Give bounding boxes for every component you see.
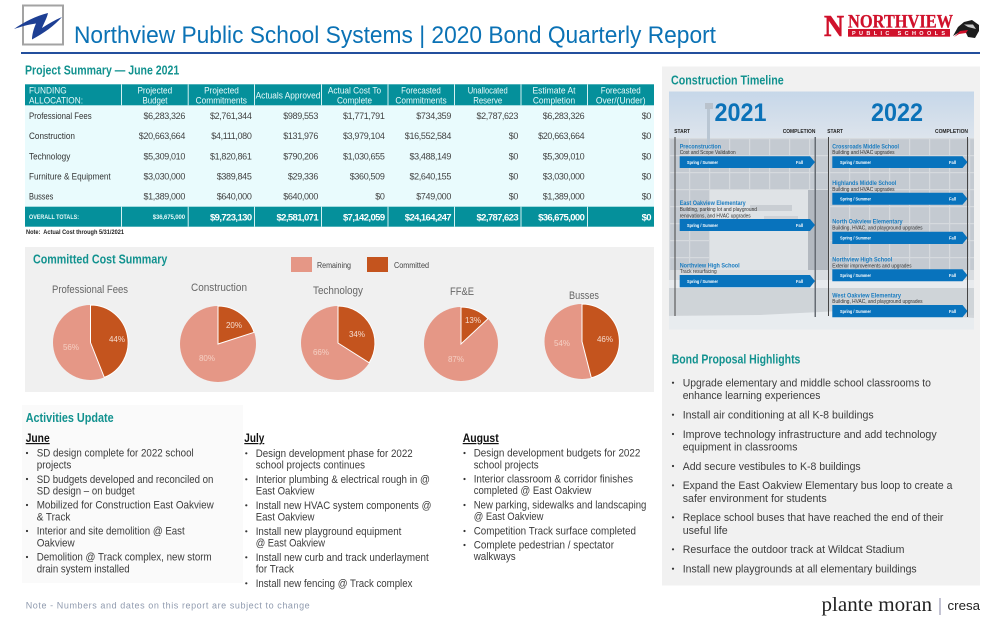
timeline item: North Oakview Elementary: Spring / Summer bbox=[840, 236, 871, 242]
table: funding allocation: $0 bbox=[642, 111, 651, 121]
table: funding allocation: Commitments bbox=[395, 95, 447, 105]
timeline item: Highlands Middle School bbox=[832, 180, 968, 205]
list: bond proposal highlights: equipment in classrooms bbox=[683, 442, 798, 454]
table: funding allocation: $1,771,791 bbox=[343, 111, 385, 121]
timeline item: Preconstruction: Cost and Scope Validation bbox=[680, 150, 736, 156]
timeline item: Crossroads Middle School: Crossroads Middle School bbox=[832, 144, 899, 150]
table: funding allocation: $0 bbox=[509, 151, 518, 161]
table: funding allocation: $734,359 bbox=[416, 111, 451, 121]
list: bond proposal highlights bbox=[672, 378, 953, 576]
table: funding allocation: $1,820,861 bbox=[210, 151, 252, 161]
column: July bbox=[244, 431, 431, 590]
table: funding allocation: $36,675,000 bbox=[538, 212, 585, 224]
table: funding allocation: $749,000 bbox=[416, 192, 451, 202]
list: bond proposal highlights: Install air conditioning at all K-8 buildings bbox=[683, 410, 874, 422]
table: funding allocation: $1,389,000 bbox=[143, 192, 185, 202]
table: funding allocation: $5,309,010 bbox=[543, 151, 585, 161]
column: July: for Track bbox=[256, 564, 294, 576]
legend: Committed bbox=[394, 261, 429, 270]
logo: plante moran | cresa bbox=[822, 594, 981, 616]
pie chart: professional fees bbox=[52, 284, 128, 380]
table: funding allocation: $16,552,584 bbox=[405, 131, 451, 141]
column: July: Install new playground equipment bbox=[256, 526, 401, 538]
year: 2021: 2021 bbox=[714, 99, 767, 127]
list: bond proposal highlights: enhance learning experiences bbox=[683, 390, 821, 402]
table: funding allocation: Commitments bbox=[196, 95, 247, 105]
table: funding allocation: ALLOCATION: bbox=[29, 95, 83, 105]
table: funding allocation: Estimate At bbox=[532, 85, 576, 95]
table: funding allocation: $9,723,130 bbox=[210, 212, 252, 224]
panel: committed cost summary bbox=[25, 247, 654, 392]
column: August: @ East Oakview bbox=[474, 511, 543, 523]
timeline item: Crossroads Middle School: Fall bbox=[949, 160, 956, 166]
table: funding allocation: Reserve bbox=[473, 95, 502, 105]
table: funding allocation: OVERALL TOTALS: bbox=[29, 214, 79, 221]
timeline item: Northview High School track bbox=[680, 262, 815, 287]
column: July: Interior plumbing & electrical rough in @ bbox=[256, 474, 430, 486]
table: funding allocation: $3,488,149 bbox=[409, 151, 451, 161]
table: funding allocation: Construction bbox=[29, 131, 75, 141]
construction timeline chart bbox=[669, 92, 974, 330]
pie chart: construction: 20% bbox=[226, 321, 242, 330]
column: June: Interior and site demolition @ East bbox=[37, 526, 185, 538]
timeline item: Highlands Middle School: Fall bbox=[949, 196, 956, 202]
timeline item: West Oakview Elementary: West Oakview Elementary bbox=[832, 292, 901, 299]
column: June: & Track bbox=[37, 512, 71, 524]
list: bond proposal highlights: Resurface the outdoor track at Wildcat Stadium bbox=[683, 544, 904, 556]
timeline item: Northview High School exterior: Northview High School bbox=[832, 256, 893, 263]
table: funding allocation: Forecasted bbox=[601, 85, 641, 95]
table: funding allocation: $6,283,326 bbox=[143, 111, 185, 121]
column: August: school projects bbox=[474, 460, 539, 472]
timeline item: North Oakview Elementary: North Oakview Elementary bbox=[832, 218, 903, 225]
heading: project summary: Project Summary — June 2021 bbox=[25, 64, 179, 78]
pie chart: professional fees: Professional Fees bbox=[52, 284, 128, 296]
pie chart: busses bbox=[544, 290, 620, 379]
timeline item: North Oakview Elementary: Building, HVAC, and playground upgrades bbox=[832, 226, 923, 232]
legend bbox=[291, 257, 429, 272]
pie chart: FF&E: FF&E bbox=[450, 286, 474, 298]
table: funding allocation: $36,675,000 bbox=[153, 215, 186, 221]
panel: activities update bbox=[22, 405, 646, 590]
list: bond proposal highlights: Expand the East Oakview Elementary bus loop to create a bbox=[683, 480, 953, 492]
column: June bbox=[26, 431, 214, 576]
timeline item: Crossroads Middle School bbox=[832, 144, 968, 168]
timeline item: West Oakview Elementary bbox=[832, 292, 968, 317]
table: funding allocation: $1,389,000 bbox=[543, 192, 585, 202]
column: July: Install new curb and track underlayment bbox=[256, 552, 429, 564]
table: funding allocation: $2,640,155 bbox=[409, 172, 451, 182]
list: bond proposal highlights: safer environment for students bbox=[683, 493, 827, 505]
table: funding allocation: $360,509 bbox=[350, 172, 385, 182]
timeline item: East Oakview Elementary: Fall bbox=[796, 223, 803, 229]
timeline item: Northview High School exterior: Exterior improvements and upgrades bbox=[832, 263, 912, 269]
timeline item: East Oakview Elementary: Spring / Summer bbox=[687, 223, 718, 229]
header rule bbox=[21, 52, 980, 54]
list: bond proposal highlights: useful life bbox=[683, 525, 728, 537]
timeline 2022 axis: START bbox=[827, 129, 843, 135]
table: funding allocation: $0 bbox=[509, 192, 518, 202]
table: funding allocation: $2,581,071 bbox=[276, 212, 319, 224]
pie chart: FF&E bbox=[424, 286, 498, 381]
column: June: projects bbox=[37, 460, 72, 472]
table: funding allocation: Actuals Approved bbox=[256, 90, 320, 100]
list: bond proposal highlights: Replace school buses that have reached the end of their bbox=[683, 512, 944, 524]
column: June: June bbox=[26, 431, 50, 445]
panel: project summary bbox=[25, 64, 654, 236]
table: funding allocation: $3,030,000 bbox=[543, 172, 585, 182]
heading: committed cost summary: Committed Cost Summary bbox=[33, 252, 167, 266]
column: June: Oakview bbox=[37, 538, 75, 550]
column: August: Interior classroom & corridor finishes bbox=[474, 474, 633, 486]
timeline item: East Oakview Elementary bbox=[680, 200, 815, 231]
logo: Northview Public Schools: N bbox=[824, 8, 844, 43]
column: June: SD budgets developed and reconciled on bbox=[37, 474, 213, 486]
year: 2022: 2022 bbox=[871, 99, 923, 127]
timeline item: Northview High School track: Fall bbox=[796, 279, 803, 285]
timeline item: West Oakview Elementary: Fall bbox=[949, 309, 956, 315]
table: funding allocation: Forecasted bbox=[401, 85, 441, 95]
column: August: walkways bbox=[473, 551, 516, 563]
table: funding allocation: Busses bbox=[29, 192, 54, 202]
table: funding allocation: $790,206 bbox=[283, 151, 318, 161]
timeline item: Northview High School exterior: Fall bbox=[949, 273, 956, 279]
table: funding allocation: $3,979,104 bbox=[343, 131, 385, 141]
column: July: Install new HVAC system components @ bbox=[256, 500, 431, 512]
table: funding allocation: Projected bbox=[137, 85, 172, 95]
table: funding allocation: $989,553 bbox=[283, 111, 318, 121]
heading: bond proposal highlights: Bond Proposal Highlights bbox=[672, 352, 800, 366]
table: funding allocation: $3,030,000 bbox=[143, 172, 185, 182]
table: funding allocation: $389,845 bbox=[217, 172, 252, 182]
timeline item: Highlands Middle School: Spring / Summer bbox=[840, 196, 871, 202]
column: August: New parking, sidewalks and landscaping bbox=[474, 500, 646, 512]
column: June: Demolition @ Track complex, new storm bbox=[37, 552, 212, 564]
column: August bbox=[463, 431, 646, 563]
table: funding allocation: $0 bbox=[509, 131, 518, 141]
timeline 2022 axis: COMPLETION bbox=[935, 129, 968, 135]
column: July: East Oakview bbox=[256, 512, 314, 524]
table: funding allocation: $5,309,010 bbox=[143, 151, 185, 161]
pie chart: construction: Construction bbox=[191, 282, 247, 294]
column: July: July bbox=[244, 431, 265, 445]
column: July: Design development phase for 2022 bbox=[256, 448, 413, 460]
timeline item: Preconstruction: Spring / Summer bbox=[687, 160, 718, 166]
timeline item: Preconstruction: Fall bbox=[796, 160, 803, 166]
column: June: Mobilized for Construction East Oakview bbox=[37, 500, 214, 512]
panel: right sidebar bbox=[662, 66, 980, 586]
pie chart: construction bbox=[180, 282, 256, 382]
table: funding allocation: $1,030,655 bbox=[343, 151, 385, 161]
timeline item: Preconstruction: Preconstruction bbox=[680, 144, 721, 150]
heading: activities update: Activities Update bbox=[26, 411, 114, 425]
pie chart: technology: 34% bbox=[349, 330, 365, 339]
timeline item: East Oakview Elementary: renovations, and HVAC upgrades bbox=[680, 213, 751, 219]
timeline item: Highlands Middle School: Highlands Middle School bbox=[832, 180, 897, 187]
column: June: SD design complete for 2022 school bbox=[37, 448, 194, 460]
timeline item: North Oakview Elementary: Fall bbox=[949, 236, 956, 242]
table: funding allocation: $0 bbox=[642, 212, 651, 224]
pie chart: FF&E: 87% bbox=[448, 355, 464, 364]
list: bond proposal highlights: Add secure vestibules to K-8 buildings bbox=[683, 461, 861, 473]
column: August: Design development budgets for 2022 bbox=[474, 448, 640, 460]
logo: plante moran | cresa: cresa bbox=[948, 598, 981, 613]
legend: Remaining bbox=[317, 261, 351, 270]
table: funding allocation: $0 bbox=[509, 172, 518, 182]
timeline item: East Oakview Elementary: Building, parking lot and playground bbox=[680, 207, 757, 213]
timeline item: Northview High School exterior bbox=[832, 256, 968, 281]
column: August: Complete pedestrian / spectator bbox=[474, 540, 614, 552]
timeline 2021 axis: COMPLETION bbox=[783, 129, 815, 135]
timeline 2021 axis: START bbox=[674, 129, 690, 135]
table footnote: Note: Actual Cost through 5/31/2021 bbox=[26, 230, 125, 236]
pie chart: technology: Technology bbox=[313, 285, 363, 297]
pie chart: professional fees: 56% bbox=[63, 343, 79, 352]
timeline 2022 axis bbox=[827, 129, 968, 317]
timeline item: North Oakview Elementary bbox=[832, 218, 968, 244]
table: funding allocation: $2,787,623 bbox=[476, 111, 518, 121]
table: funding allocation: Actual Cost To bbox=[328, 85, 381, 95]
column: August: August bbox=[463, 431, 499, 445]
table: funding allocation: Professional Fees bbox=[29, 111, 92, 121]
table: funding allocation: $0 bbox=[642, 151, 651, 161]
logo: Northview Public Schools: PUBLIC SCHOOLS bbox=[852, 31, 945, 37]
table: funding allocation: Furniture & Equipment bbox=[29, 172, 111, 182]
pie chart: construction: 80% bbox=[199, 354, 215, 363]
table: funding allocation: $0 bbox=[642, 172, 651, 182]
table: funding allocation: $640,000 bbox=[283, 192, 318, 202]
table: funding allocation: $24,164,247 bbox=[405, 212, 451, 224]
table: funding allocation: $131,976 bbox=[283, 131, 318, 141]
timeline item: East Oakview Elementary: East Oakview Elementary bbox=[680, 200, 746, 207]
timeline item: Northview High School track: Northview High School bbox=[680, 262, 740, 270]
table: funding allocation: $6,283,326 bbox=[543, 111, 585, 121]
table: funding allocation: $2,787,623 bbox=[476, 212, 518, 224]
table: funding allocation: $7,142,059 bbox=[343, 212, 385, 224]
footer note: Note - Numbers and dates on this report are subject to change bbox=[26, 600, 310, 610]
table: funding allocation: Complete bbox=[337, 95, 372, 105]
logo: Northview N mark bbox=[14, 6, 63, 44]
column: August: completed @ East Oakview bbox=[474, 485, 591, 497]
logo: Northview Public Schools bbox=[824, 8, 979, 43]
timeline item: West Oakview Elementary: Building, HVAC, and playground upgrades bbox=[832, 299, 923, 305]
pie chart: professional fees: 44% bbox=[109, 335, 125, 344]
table: funding allocation: $4,111,080 bbox=[211, 131, 252, 141]
table: funding allocation: $2,761,344 bbox=[210, 111, 252, 121]
column: July: Install new fencing @ Track complex bbox=[256, 578, 413, 590]
column: August: Competition Track surface completed bbox=[474, 526, 636, 538]
list: bond proposal highlights: Improve technology infrastructure and add technology bbox=[683, 429, 937, 441]
table: funding allocation bbox=[25, 84, 654, 227]
table: funding allocation: $29,336 bbox=[288, 172, 318, 182]
pie chart: busses: 54% bbox=[554, 339, 570, 348]
table: funding allocation: Over/(Under) bbox=[596, 95, 646, 105]
pie chart: technology: 66% bbox=[313, 348, 329, 357]
table: funding allocation: Completion bbox=[533, 95, 575, 105]
table: funding allocation: $0 bbox=[375, 192, 385, 202]
table: funding allocation: $0 bbox=[642, 131, 651, 141]
background photo: school building bbox=[669, 92, 974, 330]
table: funding allocation: $20,663,664 bbox=[139, 131, 185, 141]
table: funding allocation: $640,000 bbox=[217, 192, 252, 202]
table: funding allocation: Unallocated bbox=[468, 85, 508, 95]
timeline 2021 axis bbox=[674, 129, 816, 317]
pie chart: technology bbox=[301, 285, 375, 380]
table: funding allocation: FUNDING bbox=[29, 85, 67, 95]
logo: plante moran | cresa: plante moran bbox=[822, 594, 932, 616]
timeline item: Crossroads Middle School: Building and HVAC upgrades bbox=[832, 150, 895, 156]
timeline item: Crossroads Middle School: Spring / Summer bbox=[840, 160, 871, 166]
column: June: drain system installed bbox=[37, 564, 130, 576]
heading: construction timeline: Construction Timeline bbox=[671, 74, 784, 88]
column: July: school projects continues bbox=[256, 460, 365, 472]
title: Northview Public School Systems | 2020 Bond Quarterly Report bbox=[74, 22, 716, 49]
table: funding allocation: $0 bbox=[642, 192, 651, 202]
timeline item: West Oakview Elementary: Spring / Summer bbox=[840, 309, 871, 315]
column: July: @ East Oakview bbox=[256, 538, 325, 550]
column: June: SD design – on budget bbox=[37, 486, 135, 498]
pie chart: FF&E: 13% bbox=[465, 316, 481, 325]
column: July: East Oakview bbox=[256, 486, 314, 498]
timeline item: Northview High School track: Spring / Summer bbox=[687, 279, 718, 285]
logo: Northview Public Schools: NORTHVIEW bbox=[848, 13, 953, 33]
timeline item: Northview High School exterior: Spring / Summer bbox=[840, 273, 871, 279]
pie chart: busses: 46% bbox=[597, 335, 613, 344]
table: funding allocation: Projected bbox=[204, 85, 239, 95]
list: bond proposal highlights: Upgrade elementary and middle school classrooms to bbox=[683, 378, 931, 390]
list: bond proposal highlights: Install new playgrounds at all elementary buildings bbox=[683, 564, 917, 576]
pie chart: busses: Busses bbox=[569, 290, 599, 302]
timeline item: Preconstruction bbox=[680, 144, 815, 168]
table: funding allocation: Technology bbox=[29, 151, 71, 161]
table: funding allocation: Budget bbox=[142, 95, 168, 105]
timeline item: Northview High School track: Track resurfacing bbox=[680, 269, 717, 275]
table: funding allocation: $20,663,664 bbox=[538, 131, 585, 141]
timeline item: Highlands Middle School: Building and HVAC upgrades bbox=[832, 187, 895, 193]
